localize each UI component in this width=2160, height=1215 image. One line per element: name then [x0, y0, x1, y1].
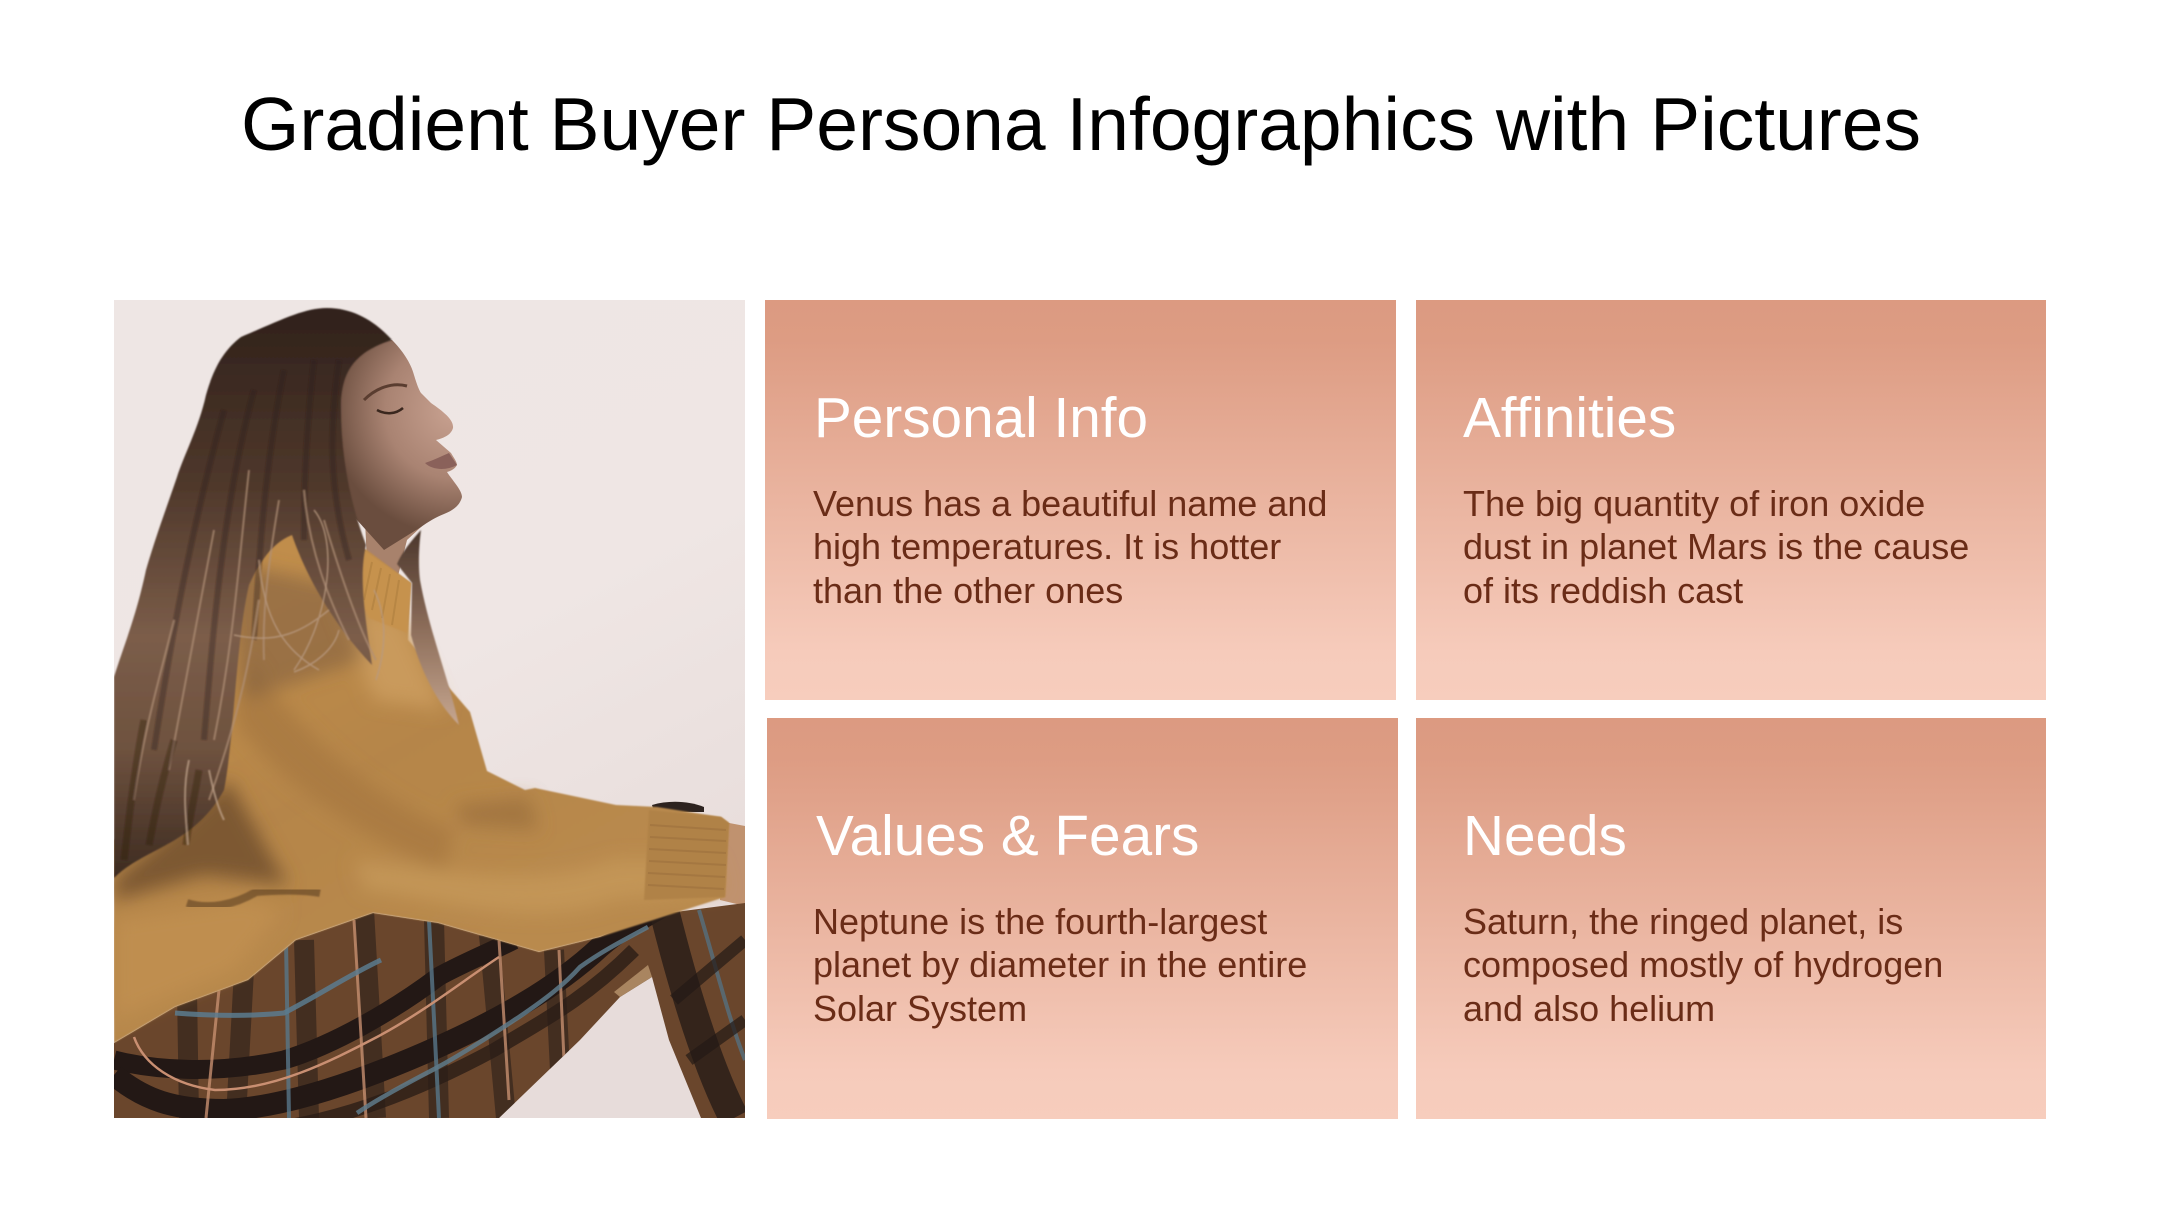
back hair behind neck — [397, 530, 459, 725]
text block: composed mostly of hydrogen — [1463, 944, 1943, 985]
heading: Needs — [1463, 805, 1627, 868]
text block — [1463, 483, 1969, 611]
hand — [720, 822, 745, 906]
hair — [114, 308, 392, 878]
heading: Personal Info — [814, 387, 1148, 450]
text block: planet by diameter in the entire — [813, 944, 1307, 985]
panel: Personal Info — [765, 300, 1396, 700]
neck — [365, 526, 422, 574]
eyebrow, closed eye and lips — [364, 385, 457, 469]
sweater — [114, 525, 729, 1043]
sweater shading and folds — [114, 560, 724, 1020]
panel: Values & Fears — [767, 718, 1398, 1119]
title: Gradient Buyer Persona Infographics with Pictures — [241, 82, 1921, 166]
heading: Affinities — [1463, 387, 1676, 450]
text block: of its reddish cast — [1463, 570, 1743, 611]
panel: Affinities — [1416, 300, 2046, 700]
text block: than the other ones — [813, 570, 1123, 611]
text block: Saturn, the ringed planet, is — [1463, 901, 1903, 942]
dark garment at wrist — [652, 802, 704, 812]
heading: Values & Fears — [816, 805, 1199, 868]
face — [329, 340, 462, 550]
text block: Venus has a beautiful name and — [813, 483, 1327, 524]
hair strands — [124, 360, 384, 860]
text block — [1463, 901, 1943, 1029]
text block: Solar System — [813, 988, 1027, 1029]
text block: high temperatures. It is hotter — [813, 526, 1281, 567]
sweater collar — [364, 562, 412, 630]
text block: dust in planet Mars is the cause — [1463, 526, 1969, 567]
trousers with plaid — [114, 903, 745, 1118]
photo background — [114, 300, 745, 1118]
lower sweater crease lines — [187, 891, 320, 906]
picture: woman in mustard sweater, eyes closed, in profile — [114, 300, 745, 1118]
text block: Neptune is the fourth-largest — [813, 901, 1267, 942]
sleeve cuff — [644, 810, 729, 900]
text block — [813, 901, 1307, 1029]
text block: The big quantity of iron oxide — [1463, 483, 1925, 524]
text block: and also helium — [1463, 988, 1715, 1029]
text block — [813, 483, 1327, 611]
panel: Needs — [1416, 718, 2046, 1119]
